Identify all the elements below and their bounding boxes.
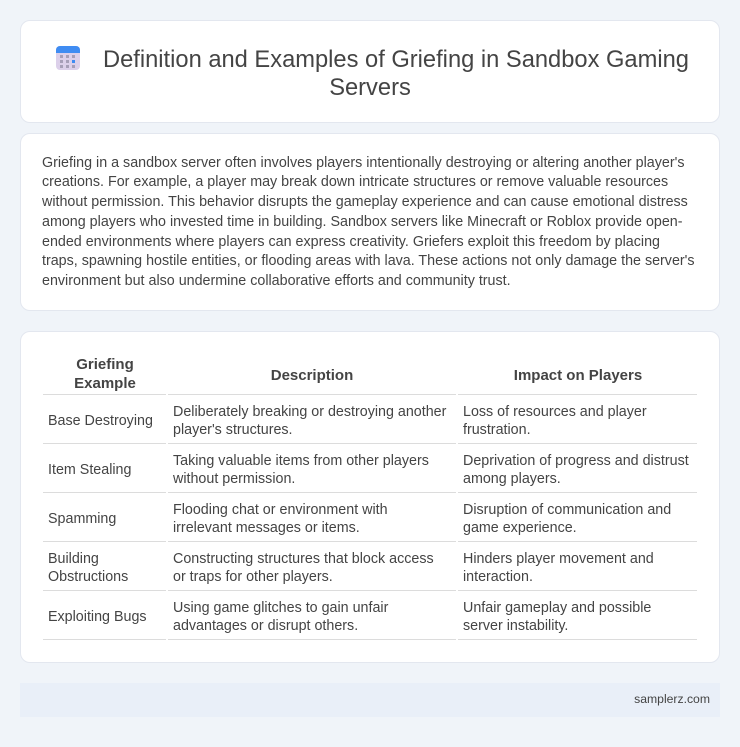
intro text: traps, spawning hostile entities, or flooding areas with lava. These actions not only damage the server's (42, 253, 695, 269)
row: Exploiting Bugs: advantages or disrupt others. (173, 618, 358, 634)
title card (20, 20, 720, 123)
row: Building Obstructions (48, 551, 654, 585)
row: Base Destroying (48, 404, 647, 438)
row: Item Stealing: among players. (463, 471, 561, 487)
intro text: creations. For example, a player may break down intricate structures or remove valuable resources (42, 174, 668, 190)
row: Base Destroying: Deliberately breaking or destroying another (173, 404, 446, 420)
row: Item Stealing: without permission. (173, 471, 295, 487)
row: Base Destroying: Loss of resources and player (463, 404, 647, 420)
icon: calendar (56, 46, 80, 70)
row: Building Obstructions: or traps for other players. (173, 569, 333, 585)
row: Spamming: Spamming (48, 511, 116, 527)
row: Building Obstructions: Building (48, 551, 99, 567)
row: Exploiting Bugs: Exploiting Bugs (48, 609, 147, 625)
row: Base Destroying: Base Destroying (48, 413, 153, 429)
row: Base Destroying: player's structures. (173, 422, 293, 438)
intro text: without permission. This behavior disrupts the gameplay experience and can cause emotional distress (42, 194, 688, 210)
intro text: ended environments where players can express creativity. Griefers exploit this freedom by placing (42, 234, 660, 250)
table header: Description (271, 367, 353, 384)
title: Servers (329, 75, 411, 101)
row: Building Obstructions: Hinders player movement and (463, 551, 654, 567)
intro text (42, 155, 695, 289)
row: Exploiting Bugs: Unfair gameplay and possible (463, 600, 651, 616)
table header: Griefing (76, 356, 134, 373)
row: Spamming (48, 502, 671, 536)
row: Exploiting Bugs: server instability. (463, 618, 568, 634)
row: Building Obstructions: Constructing structures that block access (173, 551, 434, 567)
table card (20, 331, 720, 663)
table header: Example (74, 375, 136, 392)
row: Base Destroying: frustration. (463, 422, 531, 438)
row: Item Stealing: Deprivation of progress and distrust (463, 453, 689, 469)
row: Spamming: Flooding chat or environment with (173, 502, 388, 518)
row: Building Obstructions: Obstructions (48, 569, 128, 585)
intro paragraph card (20, 133, 720, 311)
row: Exploiting Bugs: Using game glitches to gain unfair (173, 600, 388, 616)
row: Item Stealing: Taking valuable items from other players (173, 453, 429, 469)
row: Spamming: Disruption of communication and (463, 502, 671, 518)
row: Exploiting Bugs (48, 600, 651, 634)
row: Item Stealing: Item Stealing (48, 462, 131, 478)
row: Building Obstructions: interaction. (463, 569, 533, 585)
table header: Impact on Players (514, 367, 642, 384)
title (103, 47, 689, 101)
row: Spamming: irrelevant messages or items. (173, 520, 360, 536)
intro text: environment but also undermine collaborative efforts and community trust. (42, 273, 511, 289)
title: Definition and Examples of Griefing in Sandbox Gaming (103, 47, 689, 73)
table header (74, 356, 642, 392)
row: Item Stealing (48, 453, 689, 487)
footer text: samplerz.com (634, 692, 710, 706)
row: Spamming: game experience. (463, 520, 577, 536)
intro text: Griefing in a sandbox server often involves players intentionally destroying or altering another player's (42, 155, 684, 171)
intro text: among players who invested time in building. Sandbox servers like Minecraft or Roblox provide open- (42, 214, 683, 230)
footer bar (20, 683, 720, 717)
